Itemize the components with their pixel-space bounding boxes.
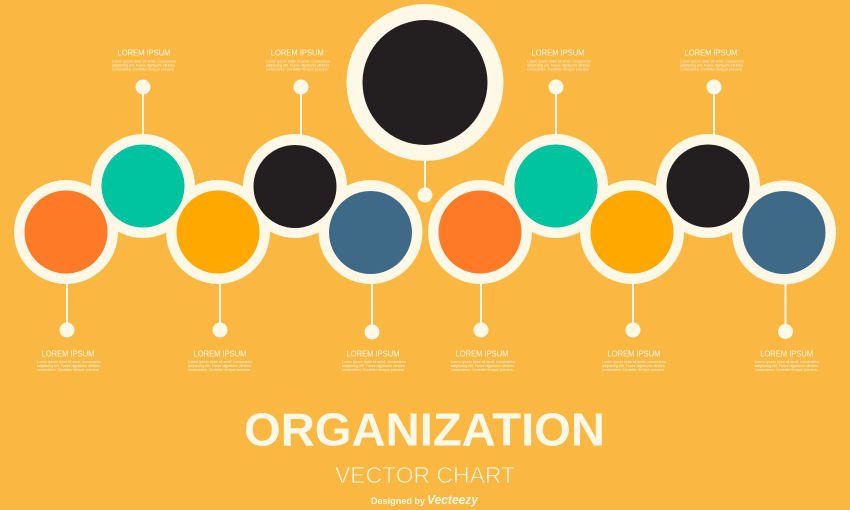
label: bottom 5: adipiscing elit. Fusce dignissim ultricies <box>602 363 665 368</box>
label: top 4: LOREM IPSUM <box>684 48 738 58</box>
connector: top node 2 <box>294 80 308 140</box>
label: top 1: consectetur. Curabitur tempor posuere <box>112 66 175 71</box>
label: bottom 5 <box>602 350 667 372</box>
circle: black right <box>666 144 750 228</box>
label: top 3: LOREM IPSUM <box>532 48 584 58</box>
connector: top node 4 <box>706 80 722 140</box>
label: top 4: consectetur. Curabitur tempor posuere <box>680 66 743 71</box>
credit: Designed by <box>371 496 426 507</box>
label: bottom 1: consectetur. Curabitur tempor posuere <box>37 367 100 372</box>
label: bottom 3: Lorem ipsum dolor sit amet, consectetur <box>342 359 407 364</box>
subtitle: VECTOR CHART <box>335 462 515 488</box>
circle: black left <box>254 145 336 228</box>
label: bottom 1: Lorem ipsum dolor sit amet, consectetur <box>37 359 102 364</box>
label: bottom 2: Lorem ipsum dolor sit amet, consectetur <box>188 359 253 364</box>
label: bottom 1: adipiscing elit. Fusce dignissim ultricies <box>37 363 100 368</box>
label: top 4: adipiscing elit. Fusce dignissim ultricies <box>680 62 743 67</box>
label: top 3: Lorem ipsum dolor sit amet, consectetur <box>527 58 592 63</box>
label: bottom 2: adipiscing elit. Fusce dignissim ultricies <box>188 363 251 368</box>
label: bottom 6 <box>755 350 820 372</box>
label: bottom 4: adipiscing elit. Fusce dignissim ultricies <box>451 363 514 368</box>
label: bottom 3: consectetur. Curabitur tempor posuere <box>342 367 405 372</box>
connector: bottom node 1 <box>60 280 74 338</box>
label: bottom 4: Lorem ipsum dolor sit amet, consectetur <box>451 359 516 364</box>
label: bottom 6: consectetur. Curabitur tempor posuere <box>755 367 818 372</box>
label: bottom 5: Lorem ipsum dolor sit amet, consectetur <box>602 359 667 364</box>
circle: teal left <box>102 144 184 228</box>
label: bottom 2: LOREM IPSUM <box>194 350 246 358</box>
label: bottom 3 <box>342 350 407 372</box>
connector: bottom node 6 <box>778 280 793 339</box>
label: bottom 4 <box>451 350 516 372</box>
circle: orange left <box>24 190 108 274</box>
circle: blue left <box>329 191 412 274</box>
label: bottom 6: LOREM IPSUM <box>760 350 813 358</box>
label: top 1: Lorem ipsum dolor sit amet, consectetur <box>112 58 177 63</box>
circle: amber left <box>176 190 260 274</box>
title: ORGANIZATION <box>244 404 605 456</box>
label: top 1: adipiscing elit. Fusce dignissim ultricies <box>112 62 175 67</box>
connector: top node 1 <box>136 80 150 140</box>
label: top 2: Lorem ipsum dolor sit amet, consectetur <box>266 58 331 63</box>
connector: bottom node 5 <box>626 280 640 338</box>
label: bottom 5: LOREM IPSUM <box>608 350 660 358</box>
connector: central node <box>418 150 432 202</box>
label: bottom 1: LOREM IPSUM <box>42 350 94 358</box>
label: bottom 6: Lorem ipsum dolor sit amet, consectetur <box>755 359 820 364</box>
label: top 2 <box>266 48 331 71</box>
label: bottom 4: LOREM IPSUM <box>456 350 508 358</box>
label: top 2: adipiscing elit. Fusce dignissim ultricies <box>266 62 329 67</box>
credit: Vecteezy <box>427 492 479 507</box>
label: top 1 <box>112 48 177 71</box>
label: top 3: adipiscing elit. Fusce dignissim ultricies <box>527 62 590 67</box>
circle: orange right <box>438 190 522 274</box>
label: top 3 <box>527 48 592 71</box>
label: bottom 4: consectetur. Curabitur tempor posuere <box>451 367 514 372</box>
label: top 1: LOREM IPSUM <box>118 48 170 58</box>
label: top 2: consectetur. Curabitur tempor posuere <box>266 66 329 71</box>
connector: top node 3 <box>548 80 564 140</box>
label: bottom 1 <box>37 350 102 372</box>
label: bottom 5: consectetur. Curabitur tempor posuere <box>602 367 665 372</box>
label: top 4: Lorem ipsum dolor sit amet, consectetur <box>680 58 745 63</box>
circle: teal right <box>514 144 598 228</box>
label: bottom 2 <box>188 350 253 372</box>
label: top 3: consectetur. Curabitur tempor posuere <box>527 66 590 71</box>
circle: central black <box>362 20 488 145</box>
label: bottom 6: adipiscing elit. Fusce dignissim ultricies <box>755 363 818 368</box>
label: bottom 3: adipiscing elit. Fusce dignissim ultricies <box>342 363 405 368</box>
connector: bottom node 4 <box>474 280 488 338</box>
connector: bottom node 2 <box>212 280 228 338</box>
circle: amber right <box>590 190 674 274</box>
credit <box>371 492 479 507</box>
label: top 4 <box>680 48 745 71</box>
label: bottom 2: consectetur. Curabitur tempor posuere <box>188 367 251 372</box>
connector: bottom node 3 <box>364 280 380 340</box>
circle: blue right <box>742 191 826 274</box>
label: top 2: LOREM IPSUM <box>271 48 324 58</box>
cream rings joining all nodes <box>14 4 836 284</box>
label: bottom 3: LOREM IPSUM <box>346 350 400 358</box>
